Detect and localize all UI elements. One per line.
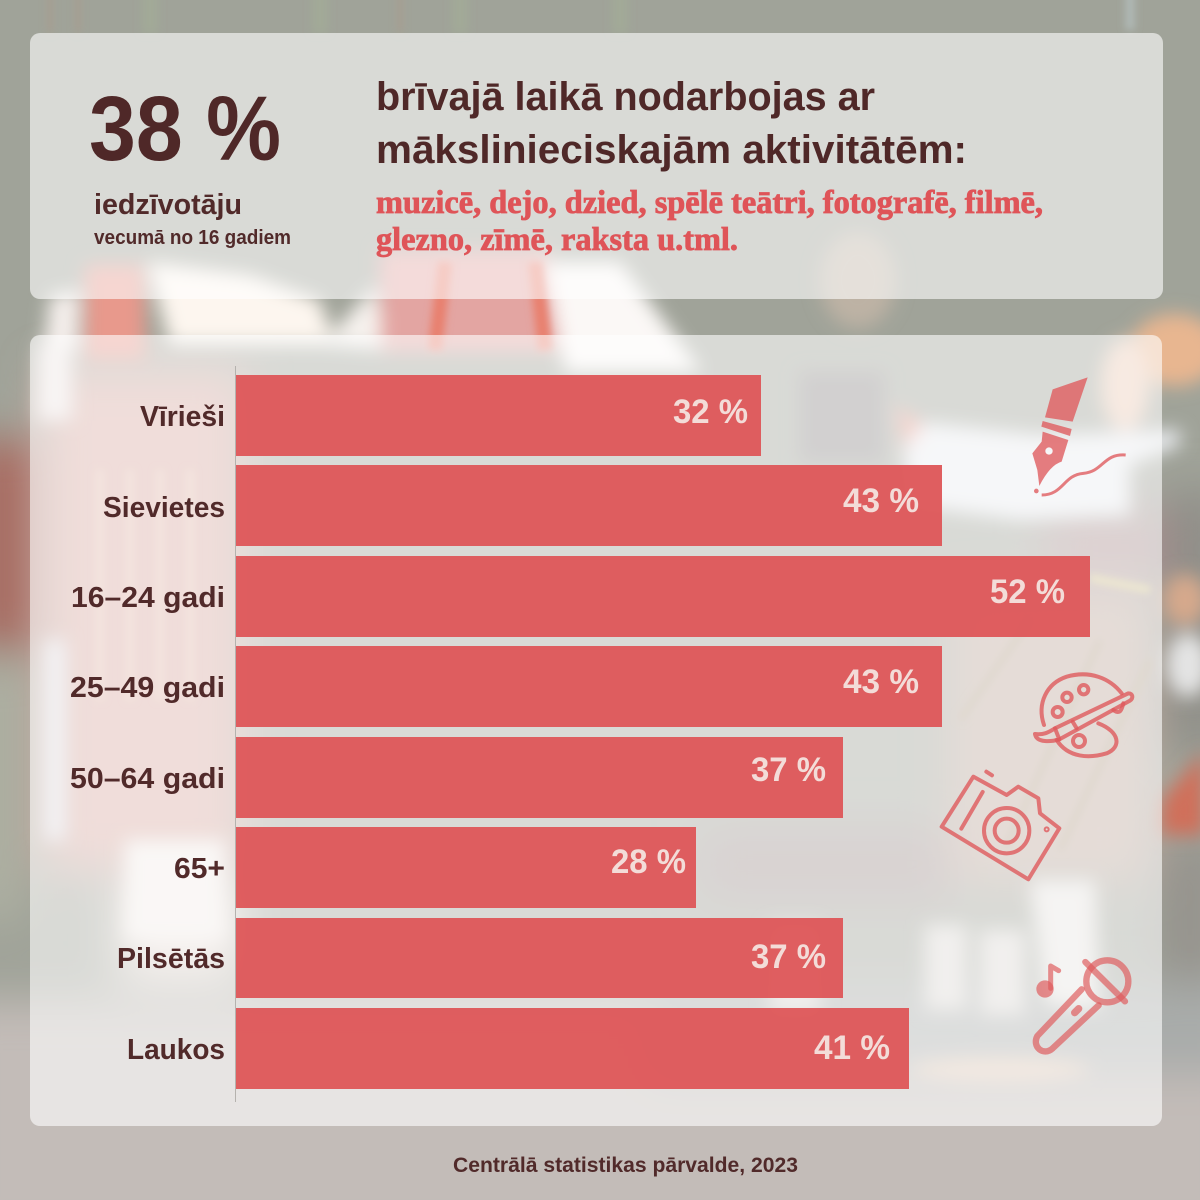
stat label: iedzīvotāju <box>94 189 242 221</box>
row: Sievietes: 43 % <box>843 482 919 520</box>
row: 50–64 gadi: 37 % <box>751 751 826 789</box>
row: Vīrieši <box>140 375 761 456</box>
row: 65+: 28 % <box>611 843 686 881</box>
row: 65+: 65+ <box>174 853 225 885</box>
row: Pilsētās: 37 % <box>751 938 826 976</box>
row: Pilsētās <box>117 918 843 998</box>
row: 25–49 gadi <box>70 646 942 727</box>
row: 16–24 gadi: 52 % <box>990 573 1065 611</box>
heading <box>376 75 967 172</box>
row: 25–49 gadi: 43 % <box>843 663 919 701</box>
icon: fountain pen <box>1032 377 1126 495</box>
icon: microphone and music note <box>1036 960 1128 1051</box>
row: Vīrieši: Vīrieši <box>140 401 225 433</box>
row: Laukos: 41 % <box>814 1029 890 1067</box>
row: 25–49 gadi: 25–49 gadi <box>70 672 225 704</box>
stat sublabel: vecumā no 16 gadiem <box>94 227 291 249</box>
panel: bar chart <box>30 335 1162 1126</box>
heading: mākslinieciskajām aktivitātēm: <box>376 128 967 172</box>
big stat: 38 %: 38 % <box>89 78 281 180</box>
subheading: list of activities <box>376 185 1043 258</box>
row: Sievietes: Sievietes <box>103 492 225 524</box>
row: Laukos <box>127 1008 909 1089</box>
icon: camera <box>942 772 1059 879</box>
heading: brīvajā laikā nodarbojas ar <box>376 75 875 119</box>
row: Vīrieši: 32 % <box>673 393 748 431</box>
subheading: list of activities: muzicē, dejo, dzied, spēlē teātri, fotografē, filmē, <box>376 185 1043 221</box>
subheading: list of activities: glezno, zīmē, raksta u.tml. <box>376 222 738 258</box>
row: Pilsētās: Pilsētās <box>117 943 225 975</box>
row: Laukos: Laukos <box>127 1034 225 1066</box>
row: 50–64 gadi: 50–64 gadi <box>70 763 225 795</box>
icon: paint palette <box>1035 674 1132 756</box>
source footer: Centrālā statistikas pārvalde, 2023 <box>453 1154 798 1177</box>
row: 16–24 gadi: 16–24 gadi <box>71 582 225 614</box>
row: 65+ <box>174 827 696 908</box>
row: 16–24 gadi <box>71 556 1090 637</box>
panel: headline <box>30 33 1163 299</box>
row: 50–64 gadi <box>70 737 843 818</box>
row: Sievietes <box>103 465 942 546</box>
